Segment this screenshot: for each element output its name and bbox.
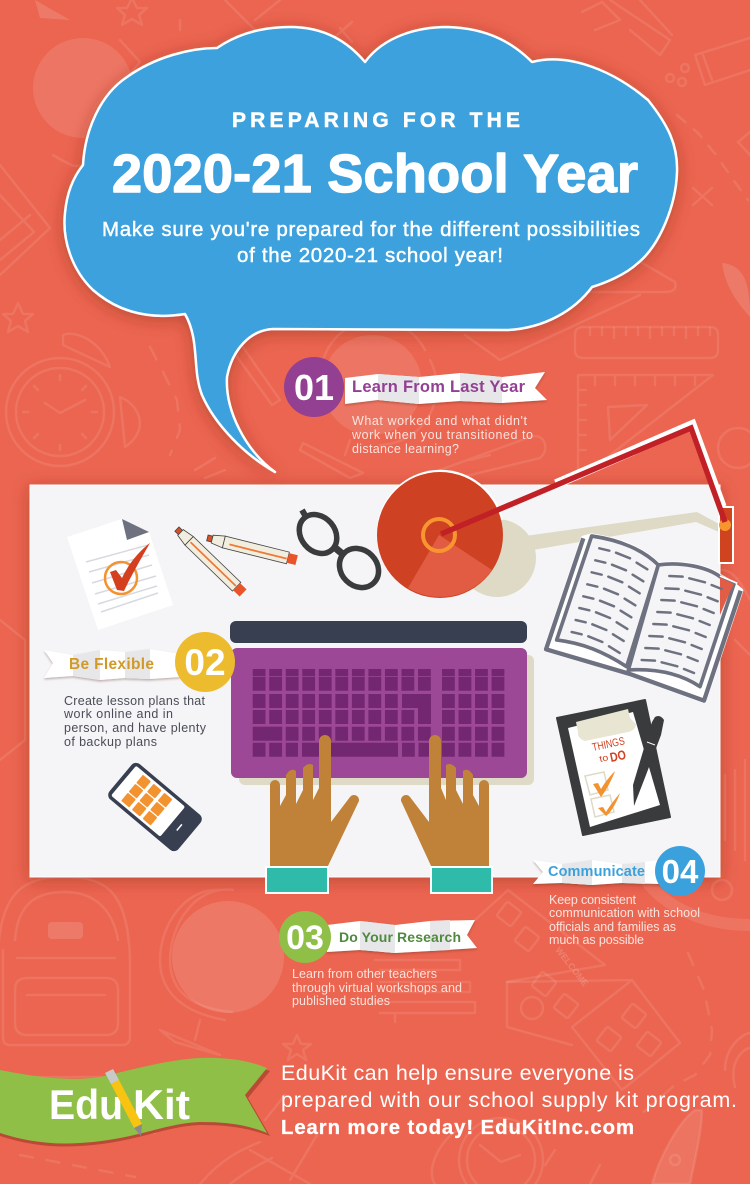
step 04 xyxy=(533,846,705,947)
text 02: Create lesson plans that xyxy=(64,694,206,708)
footer call to action: prepared with our school supply kit program. xyxy=(281,1088,737,1112)
icon: left hand xyxy=(266,735,359,893)
text 04: Keep consistent xyxy=(549,893,637,907)
icon: clipboard xyxy=(557,700,670,835)
text 01 xyxy=(351,414,533,456)
panel: desk xyxy=(30,485,720,877)
step 01 xyxy=(284,357,547,456)
footer call to action xyxy=(281,1061,737,1139)
text 02: work online and in xyxy=(63,707,173,721)
ribbon 02 xyxy=(44,649,180,680)
icon: clipboard: DO xyxy=(609,747,627,765)
icon: marker one xyxy=(173,525,247,597)
clipboard heading: THINGS xyxy=(591,735,626,754)
keyboard xyxy=(231,648,534,785)
footer call to action: EduKit can help ensure everyone is xyxy=(281,1061,634,1085)
footer call to action: Learn more today! EduKitInc.com xyxy=(281,1117,634,1139)
number 01: 01 xyxy=(294,367,334,408)
text 02 xyxy=(63,694,207,749)
text 02: person, and have plenty xyxy=(64,721,207,735)
heading 01: Learn From Last Year xyxy=(352,378,526,396)
logo banner xyxy=(0,1058,270,1147)
ribbon 01 xyxy=(345,372,547,404)
subtitle line 2: of the 2020-21 school year! xyxy=(237,244,503,267)
heading 02: Be Flexible xyxy=(69,656,154,673)
icon: lamp shadow xyxy=(458,512,719,597)
subtitle line 1: Make sure you're prepared for the different possibilities xyxy=(102,218,640,241)
text 03: published studies xyxy=(292,994,390,1008)
text 03: through virtual workshops and xyxy=(292,981,462,995)
text 04: communication with school xyxy=(549,906,700,920)
icon: phone xyxy=(106,760,204,854)
number 02 xyxy=(175,632,235,692)
ribbon 03 xyxy=(327,920,477,953)
text 01: distance learning? xyxy=(352,442,459,456)
banner shadow xyxy=(0,1061,270,1147)
speech cloud xyxy=(64,27,677,472)
WELCOME doodle text: WELCOME xyxy=(553,945,590,988)
logo wordmark: Kit xyxy=(133,1081,190,1128)
text 04: officials and families as xyxy=(549,920,676,934)
text 01: work when you transitioned to xyxy=(351,428,533,442)
text 04 xyxy=(549,893,700,947)
eyebrow heading: PREPARING FOR THE xyxy=(232,109,520,132)
icon: checked paper xyxy=(67,519,173,630)
icon: right hand xyxy=(401,735,492,893)
text 02: of backup plans xyxy=(64,735,157,749)
text 03 xyxy=(292,967,462,1008)
title block xyxy=(102,109,640,267)
icon: open book xyxy=(546,536,741,701)
number 03: 03 xyxy=(286,919,324,957)
number 04 xyxy=(655,846,705,896)
number 01 xyxy=(284,357,344,417)
number 03 xyxy=(279,911,331,963)
banner ribbon xyxy=(0,1058,267,1144)
logo wordmark xyxy=(49,1081,190,1128)
icon: lamp xyxy=(377,425,733,598)
keyboard monitor bar xyxy=(230,621,527,643)
number 04: 04 xyxy=(662,853,699,890)
icon: glasses xyxy=(291,507,387,596)
logo wordmark: Edu xyxy=(49,1081,123,1128)
text 03: Learn from other teachers xyxy=(292,967,437,981)
icon: clipboard: to xyxy=(598,752,609,764)
text 01: What worked and what didn't xyxy=(352,414,528,428)
icon: pencil xyxy=(105,1069,142,1136)
main heading: 2020-21 School Year xyxy=(112,144,638,204)
icon: marker two xyxy=(206,532,298,566)
step 02 xyxy=(44,632,235,749)
number 02: 02 xyxy=(184,642,226,683)
text 04: much as possible xyxy=(549,933,644,947)
ribbon 04 xyxy=(533,860,660,885)
step 03 xyxy=(279,911,477,1008)
heading 04: Communicate xyxy=(548,864,645,880)
heading 03: Do Your Research xyxy=(339,929,461,945)
